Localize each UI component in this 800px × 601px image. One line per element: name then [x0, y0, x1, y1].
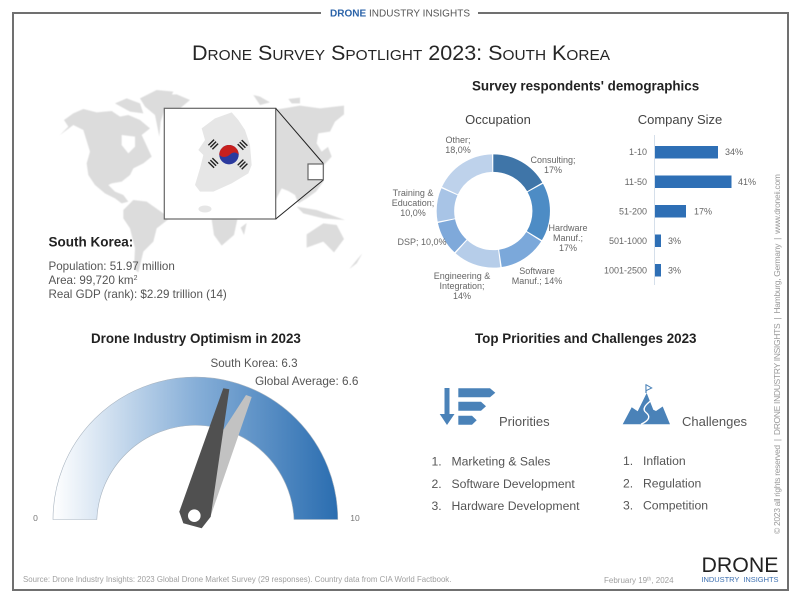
company size bar chart: 34%: [725, 147, 743, 157]
icon: priorities: [440, 388, 495, 425]
date: February 19: [604, 576, 647, 585]
donut labels: 14%: [453, 291, 471, 301]
challenges list: 2.: [623, 476, 633, 490]
challenges label: Challenges: [682, 414, 748, 429]
company size bar chart: [604, 135, 756, 285]
optimism gauge: [33, 357, 360, 528]
donut labels: 17%: [544, 165, 562, 175]
priorities list: Marketing & Sales: [452, 454, 550, 468]
inset box: [164, 108, 276, 219]
company size bar chart: 1001-2500: [604, 266, 647, 276]
donut labels: DSP; 10,0%: [397, 237, 447, 247]
occupation heading: Occupation: [465, 112, 531, 127]
challenges list: 3.: [623, 498, 633, 512]
priorities list: Hardware Development: [452, 499, 580, 513]
donut labels: Consulting;: [530, 155, 576, 165]
challenges list: 1.: [623, 454, 633, 468]
Americas and Greenland: [60, 90, 173, 272]
flag: [208, 140, 247, 169]
priorities heading: Top Priorities and Challenges 2023: [475, 331, 697, 346]
challenges list: Regulation: [643, 476, 701, 490]
source note: Source: Drone Industry Insights: 2023 Global Drone Market Survey (29 responses). Country data from CIA World Factbook.: [23, 575, 451, 584]
donut labels: [392, 135, 588, 301]
world map: [60, 90, 362, 272]
donut labels: Education;: [392, 198, 434, 208]
donut labels: 18,0%: [445, 145, 471, 155]
company size bar chart: 1-10: [629, 147, 647, 157]
company size bar chart: 17%: [694, 206, 712, 216]
donut labels: Manuf.;: [553, 233, 583, 243]
priorities list: Software Development: [452, 477, 575, 491]
demographics heading: Survey respondents' demographics: [472, 78, 699, 94]
vertical copyright text: © 2023 all rights reserved | DRONE INDUSTRY INSIGHTS | Hamburg, Germany | www.droneii.com: [772, 174, 782, 534]
challenges list: [623, 454, 708, 512]
company size bar chart: 41%: [738, 177, 756, 187]
South Korea score: South Korea: 6.3: [210, 357, 298, 370]
occupation donut chart: [392, 135, 588, 301]
challenges list: Inflation: [643, 454, 686, 468]
date: th: [647, 576, 652, 582]
optimism heading: Drone Industry Optimism in 2023: [91, 331, 301, 346]
challenges list: Competition: [643, 498, 708, 512]
donut labels: Software: [519, 266, 555, 276]
scale max: 10: [350, 513, 360, 523]
company size bar chart: 3%: [668, 236, 681, 246]
needle hub: [188, 509, 201, 522]
title: Drone Survey Spotlight 2023: South Korea: [192, 42, 610, 65]
donut labels: 10,0%: [400, 208, 426, 218]
company size bar chart: 51-200: [619, 206, 647, 216]
icon: challenges: [623, 385, 670, 424]
zoom inset with South Korea: [164, 108, 323, 219]
South Korea silhouette: [195, 112, 252, 192]
island: [198, 206, 212, 212]
gauge arc: [53, 377, 338, 520]
area: Area: 99,720 km: [48, 274, 134, 287]
company size bar chart: 11-50: [625, 177, 647, 187]
Eurasia, Africa, Australia: [160, 94, 362, 269]
donut labels: Other;: [445, 135, 471, 145]
priorities list: 3.: [432, 499, 442, 513]
donut labels: Hardware: [548, 223, 588, 233]
header brand: DRONE INDUSTRY INSIGHTS: [330, 8, 470, 20]
global score: Global Average: 6.6: [255, 374, 359, 388]
locator box: [308, 164, 323, 180]
company size heading: Company Size: [638, 112, 722, 127]
donut labels: Training &: [393, 188, 433, 198]
global average needle: [205, 395, 252, 515]
company size bar chart: 501-1000: [609, 236, 647, 246]
donut labels: Engineering &: [434, 271, 490, 281]
country facts: [48, 234, 227, 301]
connector lines: [276, 108, 323, 219]
priorities label: Priorities: [499, 414, 550, 429]
company size bar chart: 3%: [668, 266, 681, 276]
donut labels: Integration;: [439, 281, 485, 291]
donut labels: 17%: [559, 243, 577, 253]
country name: South Korea:: [48, 234, 133, 250]
logo: INDUSTRY INSIGHTS: [702, 575, 778, 584]
population: Population: 51.97 million: [48, 260, 175, 273]
priorities list: 1.: [432, 454, 442, 468]
scale min: 0: [33, 513, 38, 523]
area: 2: [134, 275, 138, 282]
priorities list: [432, 454, 580, 513]
priorities list: 2.: [432, 477, 442, 491]
donut labels: Manuf.; 14%: [512, 276, 562, 286]
date: , 2024: [651, 576, 674, 585]
South Korea needle: [179, 388, 229, 528]
GDP: Real GDP (rank): $2.29 trillion (14): [48, 288, 227, 301]
logo: DRONE: [702, 554, 778, 577]
